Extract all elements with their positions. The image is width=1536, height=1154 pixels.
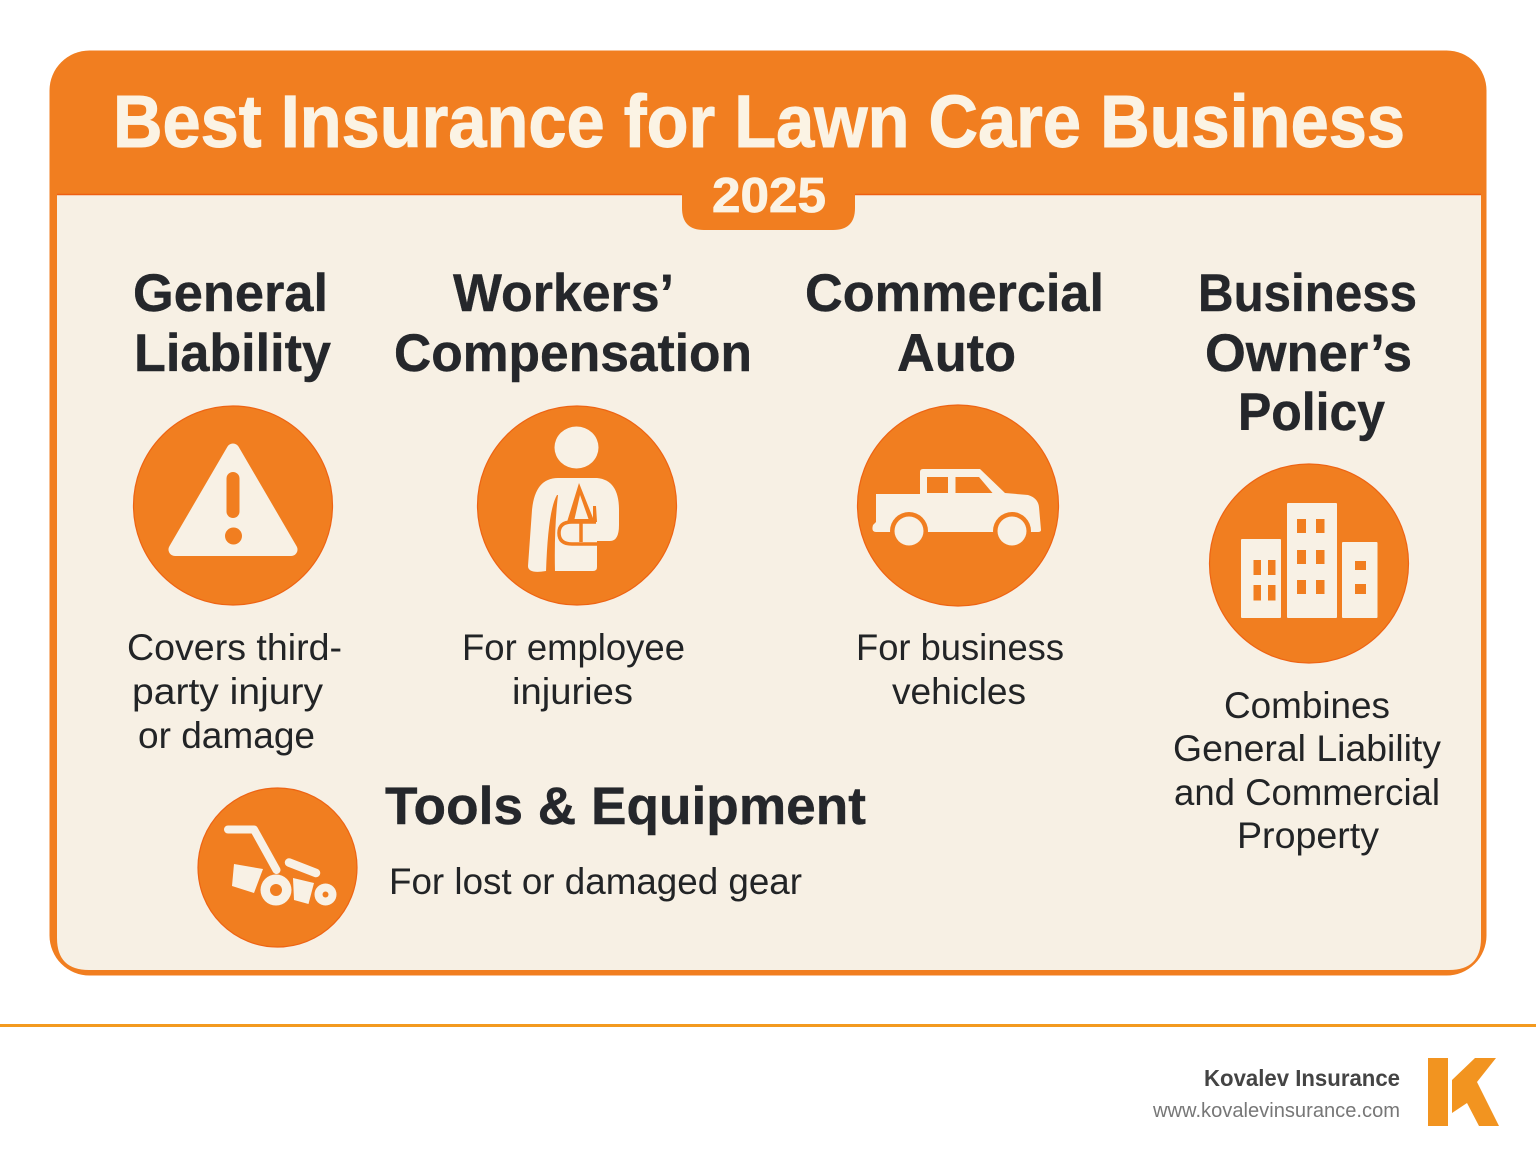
heading: general liability <box>133 264 331 383</box>
description: general liability <box>127 627 342 756</box>
heading: workers compensation <box>394 264 752 383</box>
heading: commercial auto <box>805 264 1104 383</box>
heading: commercial auto: Commercial <box>805 264 1104 323</box>
year: 2025 <box>712 169 826 223</box>
company name: Kovalev Insurance <box>1204 1065 1400 1091</box>
heading: commercial auto: Auto <box>897 324 1016 383</box>
company website: www.kovalevinsurance.com <box>1152 1100 1400 1122</box>
description: business owner's policy <box>1173 685 1441 856</box>
heading: tools and equipment: Tools & Equipment <box>385 777 866 836</box>
logo: K mark <box>1428 1058 1499 1126</box>
description: business owner's policy: and Commercial <box>1174 772 1440 813</box>
heading: workers compensation: Compensation <box>394 324 752 383</box>
icon: lawn mower <box>198 788 357 947</box>
icon: injured worker <box>478 406 676 605</box>
section: commercial auto <box>805 264 1104 712</box>
footer rule <box>0 1024 1536 1027</box>
year tab <box>682 192 855 230</box>
main panel <box>50 50 1486 976</box>
icon: warning triangle <box>134 406 332 605</box>
heading: business owner's policy: Policy <box>1238 383 1385 442</box>
heading: business owner's policy <box>1198 264 1417 442</box>
description: commercial auto: For business <box>856 627 1064 668</box>
description: workers compensation: For employee <box>462 627 685 668</box>
description: commercial auto <box>856 627 1064 712</box>
heading: general liability: General <box>133 264 328 323</box>
header edge line <box>57 194 1481 196</box>
description: commercial auto: vehicles <box>892 671 1026 712</box>
description: tools and equipment: For lost or damaged gear <box>389 861 802 902</box>
description: workers compensation: injuries <box>512 671 633 712</box>
heading: workers compensation: Workers’ <box>453 264 674 323</box>
icon: pickup truck <box>858 405 1058 606</box>
footer <box>0 1024 1536 1126</box>
description: general liability: party injury <box>132 671 324 712</box>
title: Best Insurance for Lawn Care Business <box>113 80 1405 163</box>
icon: office buildings <box>1210 464 1408 663</box>
panel cream body <box>57 195 1481 970</box>
section: general liability <box>127 264 342 756</box>
heading: business owner's policy: Business <box>1198 264 1417 323</box>
description: business owner's policy: Property <box>1237 815 1379 856</box>
section: tools and equipment <box>198 777 866 947</box>
description: general liability: Covers third- <box>127 627 342 668</box>
description: general liability: or damage <box>138 715 315 756</box>
section: business owner's policy <box>1173 264 1441 856</box>
heading: business owner's policy: Owner’s <box>1205 324 1412 383</box>
description: business owner's policy: Combines <box>1224 685 1390 726</box>
heading: general liability: Liability <box>134 324 331 383</box>
description: workers compensation <box>462 627 685 712</box>
panel frame <box>50 50 1486 976</box>
description: business owner's policy: General Liability <box>1173 728 1441 769</box>
section: workers compensation <box>394 264 752 712</box>
